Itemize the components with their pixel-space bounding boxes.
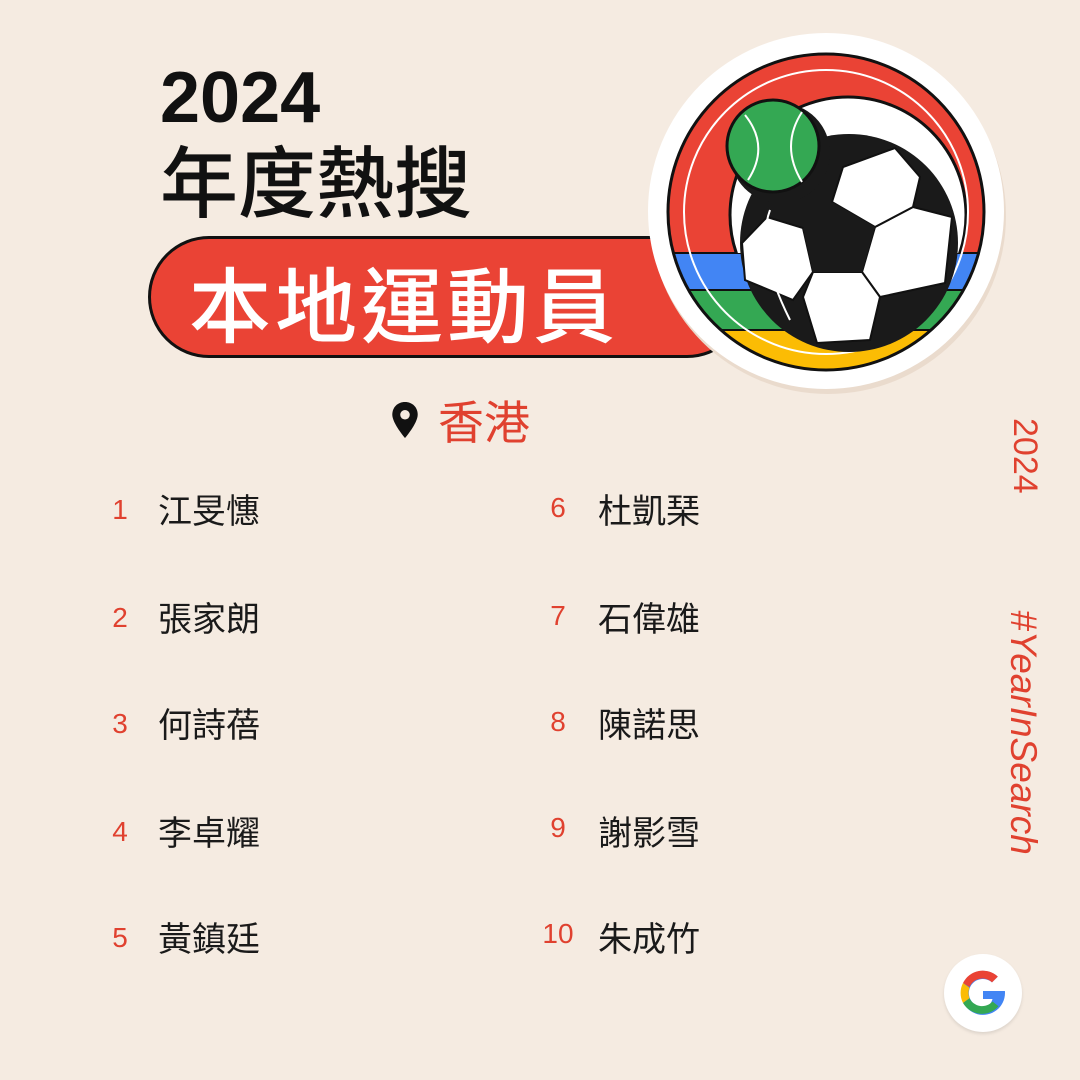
icon: Google logo <box>944 954 1022 1032</box>
pill: category banner <box>148 236 748 358</box>
location: Hong Kong <box>392 387 530 453</box>
ranking list: 3 <box>112 708 128 739</box>
location: Hong Kong: 香港 <box>438 387 530 453</box>
ranking list: 謝影雪 <box>598 806 700 855</box>
ranking list: 李卓耀 <box>158 806 260 855</box>
ranking list: 2 <box>112 602 128 633</box>
ranking list <box>112 484 700 961</box>
ranking list: 6 <box>550 492 566 523</box>
banner text: 本地運動員 <box>189 241 619 360</box>
vertical text: hashtag: #YearInSearch <box>1003 610 1044 855</box>
ranking list: 陳諾思 <box>598 698 700 747</box>
ranking list: 朱成竹 <box>598 912 700 961</box>
ranking list: 江旻憓 <box>158 484 260 533</box>
ranking list: 何詩蓓 <box>158 698 260 747</box>
ranking list: 5 <box>112 922 128 953</box>
icon: map pin <box>392 402 418 438</box>
ranking list: 9 <box>550 812 566 843</box>
title: 年度熱搜 <box>160 122 472 234</box>
ranking list: 張家朗 <box>158 592 260 641</box>
ranking list: 杜凱琹 <box>598 484 700 533</box>
title <box>160 58 472 234</box>
ranking list: 石偉雄 <box>598 592 700 641</box>
ranking list: 黃鎮廷 <box>158 912 260 961</box>
title: 2024 <box>160 58 320 138</box>
ranking list: 10 <box>542 918 574 949</box>
ranking list: 1 <box>112 494 128 525</box>
vertical text: 2024: 2024 <box>1006 418 1044 494</box>
illustration: sports balls badge <box>648 33 1006 394</box>
ranking list: 4 <box>112 816 128 847</box>
ranking list: 8 <box>550 706 566 737</box>
ranking list: 7 <box>550 600 566 631</box>
